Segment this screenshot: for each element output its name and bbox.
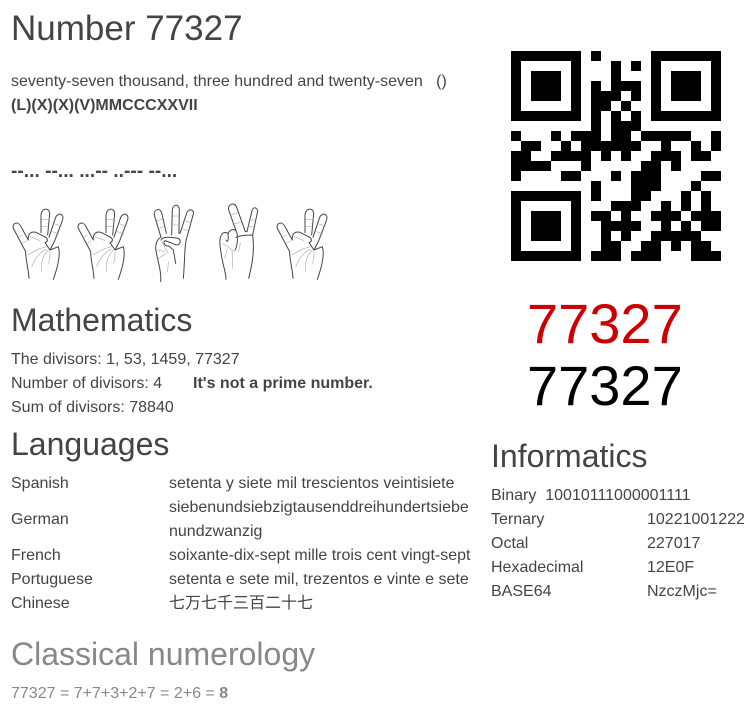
prime statement: It's not a prime number.	[193, 375, 373, 392]
languages table: Chinese	[11, 595, 70, 612]
heading: Languages: Languages	[11, 426, 169, 462]
informatics table: BASE64	[491, 583, 551, 600]
red number: 77327	[527, 292, 683, 355]
informatics table: Octal	[491, 535, 528, 552]
heading: Informatics: Informatics	[491, 438, 647, 474]
languages table: German	[11, 511, 69, 528]
languages table: soixante-dix-sept mille trois cent vingt-sept	[169, 547, 470, 564]
languages table: Portuguese	[11, 571, 93, 588]
informatics table: 10221001222	[647, 511, 745, 528]
informatics table: Ternary	[491, 511, 544, 528]
informatics table: NzczMjc=	[647, 583, 717, 600]
number name in words: seventy-seven thousand, three hundred and twenty-seven ()	[11, 73, 447, 90]
languages table: Spanish	[11, 475, 69, 492]
heading: Classical numerology: Classical numerology	[11, 636, 315, 672]
languages table: setenta e sete mil, trezentos e vinte e sete	[169, 571, 469, 588]
informatics table: 227017	[647, 535, 700, 552]
informatics table	[491, 487, 745, 600]
languages table: 七万七千三百二十七	[169, 595, 313, 612]
black number: 77327	[527, 354, 683, 417]
sum of divisors: Sum of divisors: 78840	[11, 399, 174, 416]
numerology sum: 77327 = 7+7+3+2+7 = 2+6 = 8	[11, 685, 228, 702]
divisors: The divisors: 1, 53, 1459, 77327	[11, 351, 240, 368]
morse code: --... --... ...-- ..--- --...	[11, 161, 177, 182]
informatics table: 12E0F	[647, 559, 694, 576]
languages table: nundzwanzig	[169, 523, 262, 540]
icon: sign language hands	[12, 204, 328, 282]
roman numeral: (L)(X)(X)(V)MMCCCXXVII	[11, 97, 198, 114]
QR code	[511, 51, 721, 261]
informatics table: Hexadecimal	[491, 559, 583, 576]
languages table: French	[11, 547, 61, 564]
title: Number 77327	[11, 9, 243, 48]
languages table: setenta y siete mil trescientos veintisiete	[169, 475, 454, 492]
languages table: siebenundsiebzigtausenddreihundertsiebe	[169, 499, 469, 516]
informatics table: Binary 10010111000001111	[491, 487, 691, 504]
languages table	[11, 475, 470, 612]
heading: Mathematics: Mathematics	[11, 302, 192, 338]
number of divisors: Number of divisors: 4	[11, 375, 162, 392]
